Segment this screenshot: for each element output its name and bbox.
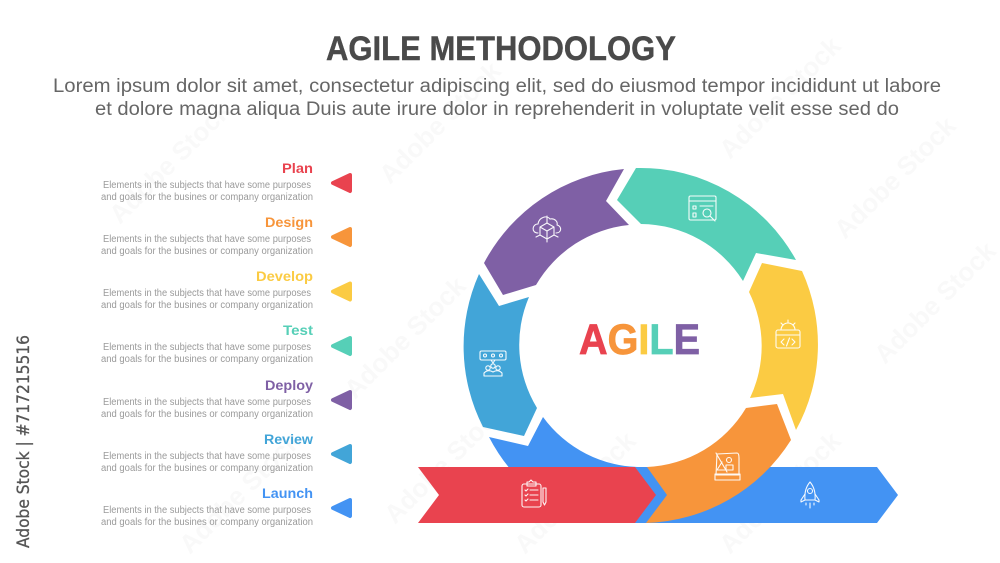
text: Adobe Stock — [508, 425, 642, 559]
list item: Design: and goals for the busines or company organization — [101, 246, 313, 257]
text: Adobe Stock — [173, 425, 307, 559]
text: Adobe Stock — [868, 235, 1000, 369]
icon: test window magnifier — [689, 196, 716, 221]
subtitle: Lorem ipsum dolor sit amet, consectetur adipiscing elit, sed do eiusmod tempor incididunt ut labore — [53, 76, 941, 97]
list item: Design: Elements in the subjects that have some purposes — [103, 234, 311, 245]
list item: Test: and goals for the busines or company organization — [101, 354, 313, 365]
text: Adobe Stock — [378, 395, 512, 529]
icon: rating people — [480, 351, 506, 376]
list item: Plan: Elements in the subjects that have some purposes — [103, 180, 311, 191]
list item: Deploy: Deploy — [265, 378, 314, 393]
list item: Review: Elements in the subjects that have some purposes — [103, 451, 311, 462]
list item: Launch — [101, 486, 350, 528]
list item: Review — [101, 432, 350, 474]
icon: rocket — [801, 482, 819, 508]
center label: AGILE: AGILE — [579, 316, 700, 364]
list item: Launch: Elements in the subjects that have some purposes — [103, 505, 311, 516]
icon: clipboard — [522, 480, 546, 507]
segment: Plan red arrow — [418, 467, 656, 523]
segment: Review blue — [464, 274, 537, 436]
list item: Test: Test — [283, 323, 314, 338]
cycle diagram — [418, 168, 898, 523]
list item: Test — [101, 323, 350, 365]
list item: Launch: Launch — [262, 486, 313, 501]
text: Adobe Stock — [103, 95, 237, 229]
list item: Plan: and goals for the busines or company organization — [101, 192, 313, 203]
list item: Develop: Develop — [256, 269, 313, 284]
icon: blueprint tools — [715, 453, 740, 480]
list item: Develop — [101, 269, 350, 311]
segment: Deploy purple — [484, 169, 629, 295]
subtitle — [53, 76, 941, 120]
list item: Plan — [101, 161, 350, 203]
list item: Test: Elements in the subjects that have some purposes — [103, 342, 311, 353]
list item: Develop: Elements in the subjects that have some purposes — [103, 288, 311, 299]
icon: cloud cube — [533, 216, 561, 242]
list item: Review: and goals for the busines or company organization — [101, 463, 313, 474]
list item: Launch: and goals for the busines or company organization — [101, 517, 313, 528]
text: Adobe Stock — [338, 270, 472, 404]
segment: Develop yellow — [749, 263, 818, 430]
stock credit: Adobe Stock | #717215516 — [14, 335, 34, 548]
segment: Launch blue arc and arrow — [489, 417, 898, 523]
segment: Design orange — [646, 404, 791, 523]
list item: Deploy — [101, 378, 350, 420]
text: Adobe Stock — [373, 55, 507, 189]
list item: Deploy: Elements in the subjects that have some purposes — [103, 397, 311, 408]
subtitle: et dolore magna aliqua Duis aute irure dolor in reprehenderit in voluptate velit esse sed do — [95, 99, 899, 120]
list item: Review: Review — [264, 432, 314, 447]
icon: code window gear — [776, 320, 800, 348]
list item: Design: Design — [265, 215, 313, 230]
text: Adobe Stock — [828, 110, 962, 244]
segment: Test teal — [617, 168, 796, 281]
title: AGILE METHODOLOGY — [326, 30, 676, 68]
list item: Develop: and goals for the busines or company organization — [101, 300, 313, 311]
list item: Plan: Plan — [282, 161, 313, 176]
list item: Deploy: and goals for the busines or company organization — [101, 409, 313, 420]
text: Adobe Stock — [713, 425, 847, 559]
text: Adobe Stock — [713, 30, 847, 164]
list item: Design — [101, 215, 350, 257]
